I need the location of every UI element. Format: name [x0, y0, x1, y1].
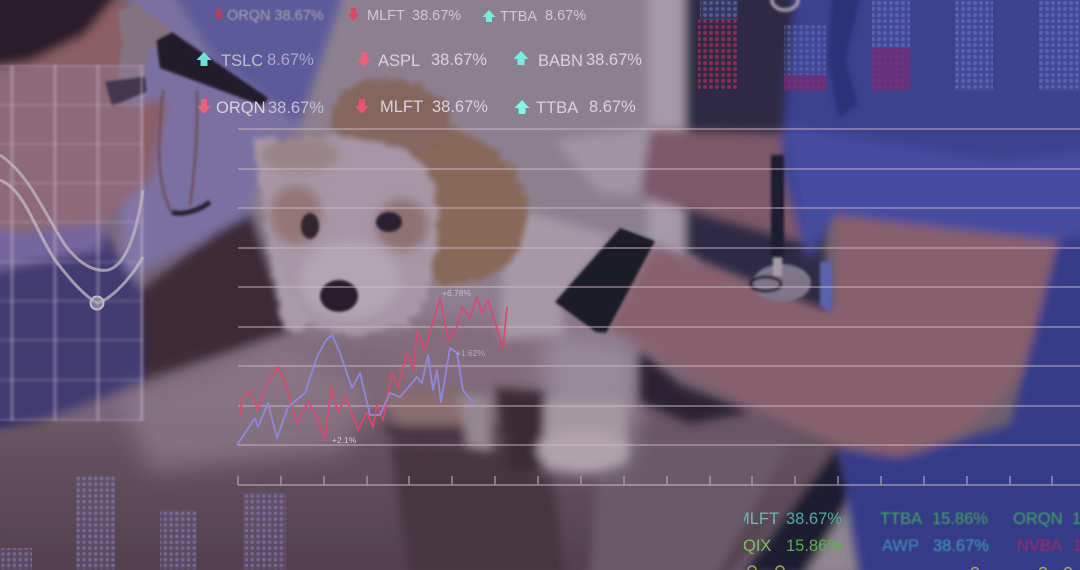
ticker row two: TSLC: [221, 52, 263, 70]
ticker row two: 8.67%: [267, 51, 314, 69]
bottom ticker rows: ORQN: [1013, 510, 1062, 528]
light door frame strip: [648, 0, 686, 255]
curve marker: [90, 296, 104, 310]
otoscope: [105, 3, 268, 106]
chart x axis with ticks: [238, 476, 1080, 485]
ticker row one: [214, 8, 586, 25]
curve two: [0, 180, 143, 303]
vet stethoscope tubing: [159, 90, 210, 214]
bottom ticker rows: MLFT: [736, 510, 779, 528]
ticker row two: BABN: [538, 52, 583, 70]
vet coat: [120, 0, 300, 285]
bottom ticker rows: TTBA: [880, 510, 922, 528]
puppy right ear: [395, 124, 528, 285]
chart value labels: +6.78%: [442, 288, 472, 298]
chart value labels: +2.1%: [332, 435, 357, 445]
upper forearm: [640, 130, 810, 245]
scrub strip: [820, 262, 832, 312]
puppy head top tuft: [330, 78, 452, 155]
watch strap: [555, 228, 655, 333]
chart value labels: [332, 288, 486, 445]
ticker row two: 38.67%: [431, 51, 487, 69]
ticker row two: [196, 51, 642, 70]
bottom ticker rows: 15.86%: [786, 537, 842, 555]
table reflection dark: [390, 445, 565, 570]
table glow: [120, 345, 380, 470]
ticker row one: TTBA: [500, 9, 537, 25]
ticker row two: 38.67%: [586, 51, 642, 69]
puppy nose: [320, 280, 358, 312]
ticker row three: MLFT: [380, 98, 423, 116]
scrub lower body: [838, 235, 1080, 570]
bottom ticker rows: 38.67%: [933, 537, 989, 555]
wall behind the puppy: [200, 0, 695, 345]
puppy cheek shading: [270, 185, 322, 245]
scrub fold: [828, 0, 862, 118]
ticker row three: 8.67%: [589, 98, 636, 116]
vet hair: [0, 0, 122, 68]
table edge dark: [742, 445, 856, 570]
ticker row three: [197, 98, 636, 117]
white glove and dog flank: [555, 128, 652, 195]
vet face and hand: [0, 0, 168, 232]
ticker row three: ORQN: [216, 99, 266, 117]
ticker row one: MLFT: [367, 8, 405, 24]
dark area under the vet's coat: [130, 205, 292, 388]
puppy head: [262, 136, 437, 334]
stethoscope ring top: [772, 0, 798, 10]
partial ticker glyphs at bottom edge: [748, 566, 1072, 570]
stethoscope: [751, 155, 811, 302]
bottom ticker rows: 38.67%: [786, 510, 842, 528]
dotted bars top right: [698, 0, 1080, 91]
puppy shadow patches: [495, 388, 545, 470]
blue line chart: [237, 335, 473, 445]
puppy eyes: [301, 212, 402, 239]
ticker row three: 38.67%: [432, 98, 488, 116]
lower arm: [606, 215, 1058, 457]
vet sleeve: [0, 232, 145, 430]
puppy paw: [537, 428, 629, 472]
puppy mid body: [380, 320, 640, 395]
table light right side: [590, 440, 790, 570]
puppy chest strip: [253, 140, 320, 330]
bottom ticker rows: AWP: [882, 537, 919, 555]
curve one: [0, 155, 143, 270]
bottom ticker rows: [736, 510, 1080, 555]
ticker row one: 38.67%: [412, 8, 461, 24]
ticker row three: TTBA: [536, 99, 578, 117]
bottom ticker rows: 15.86%: [932, 510, 988, 528]
examination table: [0, 330, 845, 570]
dotted bars bottom left: [0, 476, 286, 570]
bottom ticker rows: QIX: [743, 537, 771, 555]
dark cabinet background: [685, 0, 830, 320]
puppy lower tan: [378, 392, 480, 425]
ticker row one: 8.67%: [545, 8, 586, 24]
puppy flank shade: [545, 330, 640, 470]
scrub top sleeve: [780, 0, 1080, 262]
puppy white leg: [458, 395, 492, 452]
ticker row three: 38.67%: [268, 99, 324, 117]
ticker row one: ORQN 38.67%: [227, 8, 324, 24]
chart value labels: +1.62%: [456, 348, 486, 358]
ticker row two: ASPL: [378, 52, 420, 70]
bottom ticker rows: NVBA: [1017, 537, 1062, 555]
left grid panel with curves: [0, 65, 143, 421]
red line chart: [240, 297, 507, 440]
horizontal chart grid lines: [238, 129, 1080, 445]
